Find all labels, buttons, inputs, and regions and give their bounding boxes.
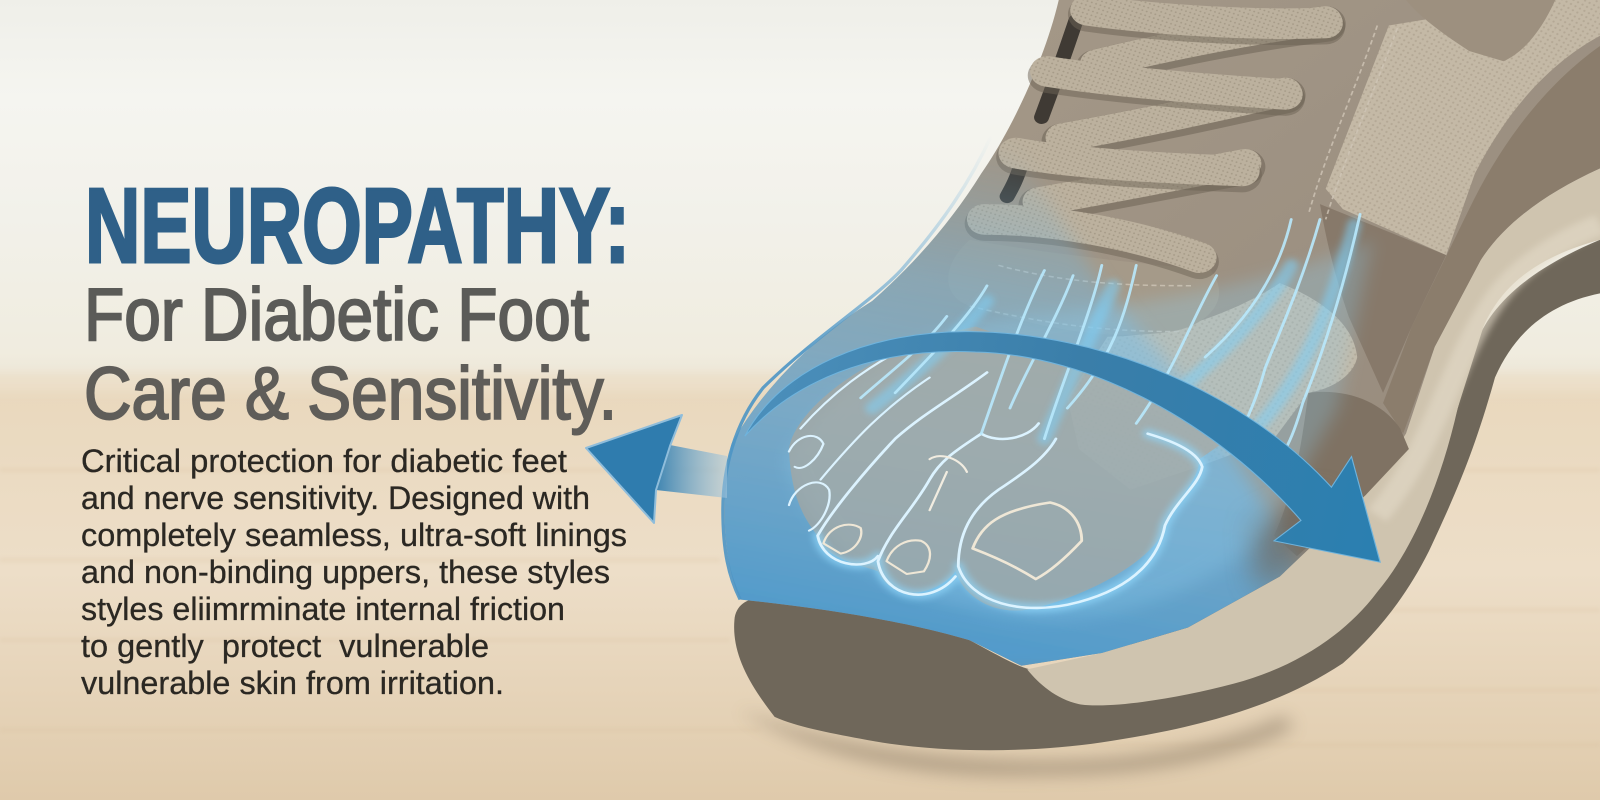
- second toe: [878, 423, 1039, 595]
- lace shadows: [1039, 24, 1326, 205]
- shoe illustration: [677, 0, 1600, 776]
- dark heel leather band: [1383, 46, 1600, 434]
- arrow shaft: [656, 445, 727, 498]
- main lace shadows: [984, 14, 1326, 262]
- body text block: and non-binding uppers, these styles: [81, 554, 610, 590]
- wood floor: [0, 374, 1600, 800]
- body text block: vulnerable skin from irritation.: [81, 665, 504, 701]
- vamp panel: [948, 240, 1219, 335]
- midsole: [1027, 168, 1600, 705]
- nerve streaks: [861, 214, 1360, 449]
- third toe: [818, 372, 987, 564]
- toe knuckle highlights: [930, 456, 967, 510]
- subtitle line 2: Care & Sensitivity.: [84, 352, 617, 435]
- body text block: styles eliimrminate internal friction: [81, 591, 565, 627]
- vamp stitching: [970, 26, 1397, 332]
- upper body: [725, 0, 1600, 666]
- wall background: [0, 0, 1600, 392]
- toe cap edge line: [723, 133, 993, 599]
- body text block: Critical protection for diabetic feet: [81, 443, 567, 479]
- outsole: [734, 240, 1600, 750]
- quarter overlay strap: [1406, 0, 1555, 61]
- laces: [984, 10, 1326, 262]
- blue toe cap wash: [724, 166, 1300, 666]
- upper mesh panel: [1326, 0, 1600, 255]
- body text block: [81, 443, 627, 701]
- left pointing arrow: [586, 415, 727, 523]
- second toe nail: [887, 540, 930, 574]
- main laces: [984, 10, 1326, 258]
- curved blue arrow: [745, 332, 1380, 562]
- body text block: to gently protect vulnerable: [81, 628, 489, 664]
- title: NEUROPATHY: NEUROPATHY:: [85, 167, 630, 285]
- subtitle line 1: For Diabetic Foot: [84, 273, 589, 356]
- foot outline glow: [818, 434, 1202, 608]
- tongue gap: [1007, 20, 1076, 196]
- body text block: completely seamless, ultra-soft linings: [81, 517, 627, 553]
- side leather panel: [1274, 392, 1409, 556]
- forefoot mesh panel: [1067, 283, 1357, 490]
- leather shade beside big toe: [1238, 502, 1309, 592]
- third toe nail: [823, 525, 861, 554]
- body text block: and nerve sensitivity. Designed with: [81, 480, 590, 516]
- floor shadow under shoe: [740, 709, 1291, 776]
- arrow head: [586, 415, 682, 523]
- fourth toe: [789, 378, 930, 531]
- foot body fill: [789, 327, 1251, 611]
- big toe: [958, 434, 1202, 608]
- nerve glow: [872, 224, 1354, 439]
- midsole inner highlight: [1377, 224, 1600, 515]
- translucent foot: [789, 214, 1360, 611]
- side overlay panel: [1320, 204, 1446, 393]
- fifth toe: [789, 347, 907, 468]
- big toe nail: [973, 503, 1082, 579]
- cross laces: [1039, 20, 1326, 202]
- glow behind foot: [786, 240, 1372, 619]
